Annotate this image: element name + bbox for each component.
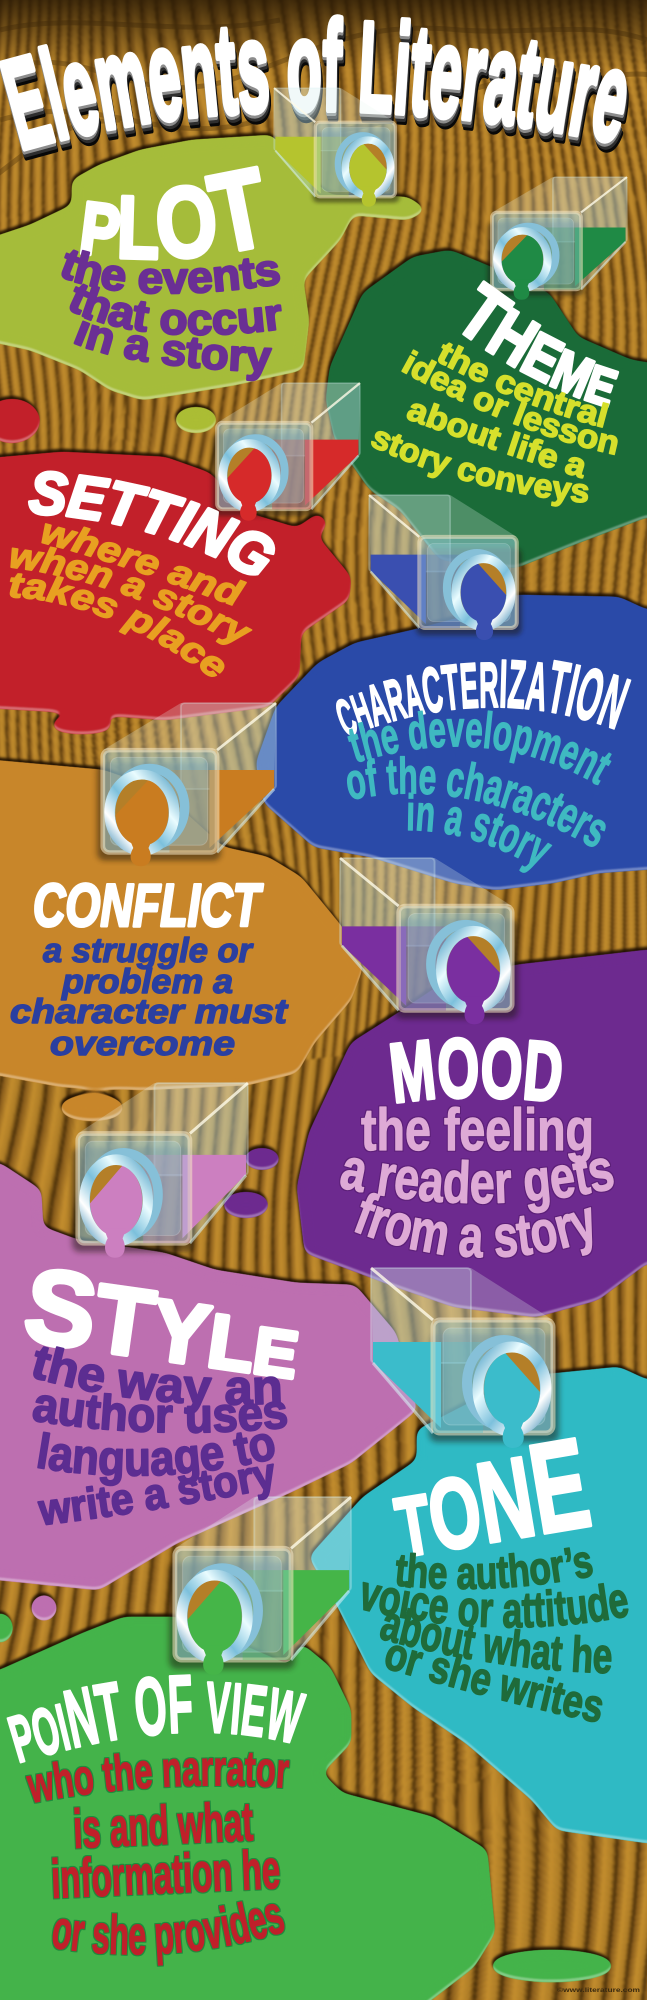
text: conflict (10, 872, 289, 1063)
heading: plot: PLOT (80, 166, 261, 261)
bottle: conflict (97, 703, 276, 866)
definition: theme: about life a (406, 402, 584, 479)
definition: point of view: who the narrator (25, 1752, 290, 1804)
puddle: point of view (0, 1613, 613, 2000)
bottle: style (72, 1083, 248, 1258)
definition: conflict: character must (10, 993, 289, 1031)
definition: style: the way an (33, 1346, 281, 1414)
definition: mood: from a story (354, 1192, 594, 1259)
text: tone (362, 1411, 629, 1722)
definition: characterization: the development (347, 710, 612, 786)
heading: mood: MOOD (390, 1036, 562, 1104)
purple drops (244, 1148, 280, 1170)
bottle: theme (488, 177, 627, 300)
heading: theme: THEME (462, 280, 620, 408)
puddle: style (0, 1163, 417, 1621)
orange drop (60, 1095, 124, 1121)
definition: setting: where and (41, 523, 247, 606)
copyright line: ©www.literature.com (557, 1987, 640, 1994)
definition: point of view (25, 1752, 290, 1967)
definition: conflict (10, 932, 289, 1063)
bottle: setting (212, 383, 360, 521)
definition: plot: in a story (74, 314, 272, 382)
text: style (18, 1246, 308, 1526)
small olive drop (175, 407, 217, 433)
definition: point of view: is and what (72, 1790, 254, 1860)
definition: conflict: problem a (61, 963, 233, 1001)
definition: plot: that occur (70, 284, 282, 336)
definition: tone: or she writes (385, 1645, 602, 1722)
definition: point of view: information he (50, 1838, 281, 1910)
text: theme (371, 280, 620, 507)
bottle: characterization (369, 495, 522, 640)
definition: setting: when a story (10, 546, 252, 645)
definition: plot: the events (61, 250, 280, 294)
text: mood (339, 1036, 615, 1259)
definition: theme: the central (438, 342, 610, 428)
text: point of view (6, 1674, 307, 1967)
definition: mood: a reader gets (339, 1154, 615, 1214)
puddle: tone (309, 1367, 647, 1843)
puddle: characterization (256, 595, 647, 890)
definition: tone: about what he (380, 1608, 612, 1674)
pink drop (31, 1595, 57, 1621)
heading: conflict: CONFLICT (33, 872, 263, 939)
text: characterization (336, 659, 632, 873)
definition: theme (371, 342, 618, 507)
definition: characterization: of the characters (346, 756, 606, 847)
red drop left (0, 399, 40, 443)
definition: tone (362, 1547, 629, 1722)
definition: tone: the author’s (396, 1547, 593, 1590)
definition: setting: takes place (10, 573, 224, 677)
definition: point of view: or she provides (52, 1900, 286, 1967)
bottle: plot (274, 88, 399, 207)
definition: characterization (346, 710, 612, 873)
definition: theme: story conveys (371, 430, 589, 507)
puddle: setting (0, 399, 351, 734)
green drop left (0, 1613, 13, 1643)
definition: style: language to (37, 1432, 275, 1486)
definition: theme: idea or lesson (401, 349, 618, 456)
heading: style: STYLE (18, 1246, 308, 1401)
bottle: mood (340, 858, 518, 1024)
heading: setting: SETTING (28, 470, 276, 576)
red drop oval (51, 716, 113, 734)
definition: tone: voice or attitude (362, 1580, 629, 1628)
definition: characterization: in a story (408, 792, 552, 873)
text: plot (61, 166, 282, 382)
puddle: plot (0, 135, 427, 433)
puddle: theme (326, 250, 647, 568)
definition: conflict: a struggle or (43, 932, 254, 970)
green drop bottom right (491, 1950, 613, 1982)
puddle: conflict (0, 758, 363, 1121)
heading: tone: TONE (383, 1411, 599, 1585)
puddle: mood (223, 950, 647, 1317)
definition: mood (339, 1097, 615, 1259)
bottle: tone (371, 1268, 559, 1448)
text: setting (10, 470, 276, 677)
bottle: point of view (169, 1497, 351, 1675)
definition: conflict: overcome (50, 1025, 235, 1063)
heading: point of view: POINT OF VIEW (6, 1674, 307, 1764)
definition: style (32, 1346, 288, 1526)
definition: style: author uses (32, 1392, 288, 1434)
definition: style: write a story (37, 1463, 274, 1526)
definition: plot (61, 250, 282, 382)
